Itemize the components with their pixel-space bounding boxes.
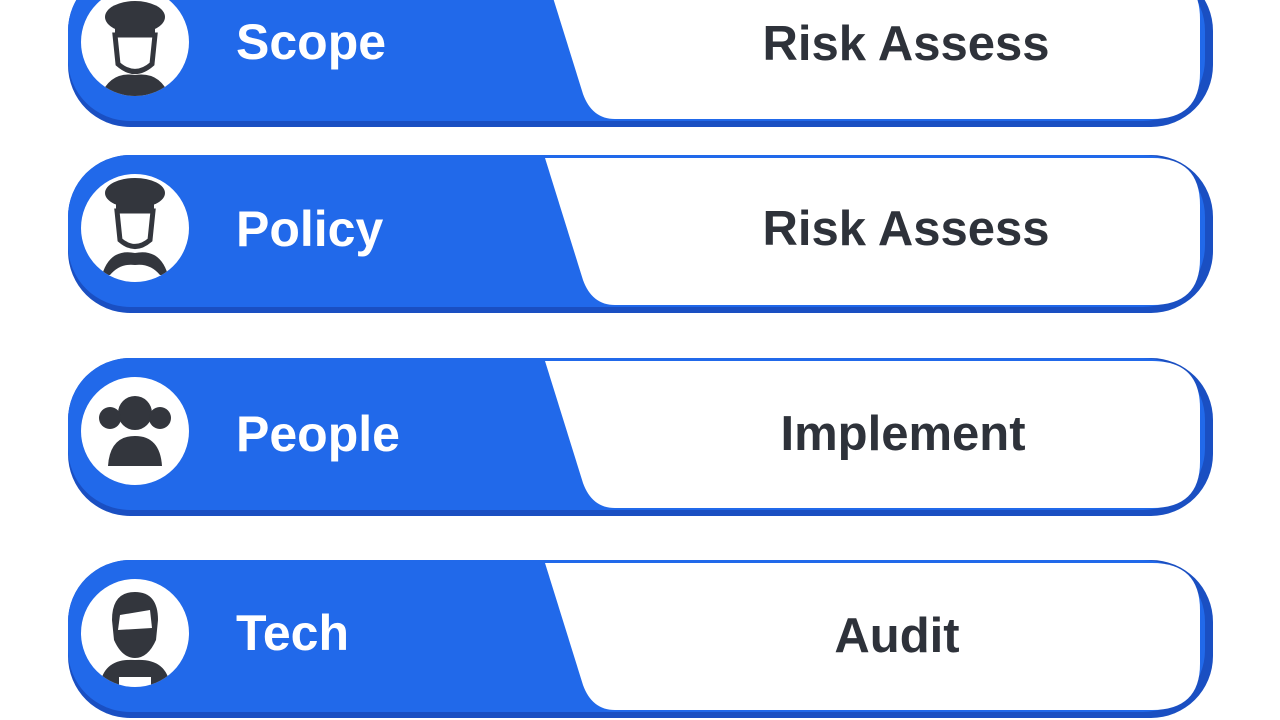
icon: bearded man <box>100 592 170 685</box>
row: Tech <box>68 560 1213 718</box>
text: Implement: Implement <box>780 407 1026 461</box>
text: Risk Assess: Risk Assess <box>763 17 1049 71</box>
text: Audit: Audit <box>834 609 960 663</box>
label: Tech: Tech <box>236 605 349 661</box>
row: Scope <box>68 0 1213 127</box>
icon: chef woman <box>102 178 168 275</box>
text: Risk Assess: Risk Assess <box>763 202 1049 256</box>
row: People <box>68 358 1213 516</box>
icon: people group <box>99 396 171 466</box>
label: Scope: Scope <box>236 14 386 70</box>
icon: chef <box>105 1 165 96</box>
label: Policy: Policy <box>236 201 383 257</box>
row: Policy <box>68 155 1213 313</box>
label: People: People <box>236 406 400 462</box>
